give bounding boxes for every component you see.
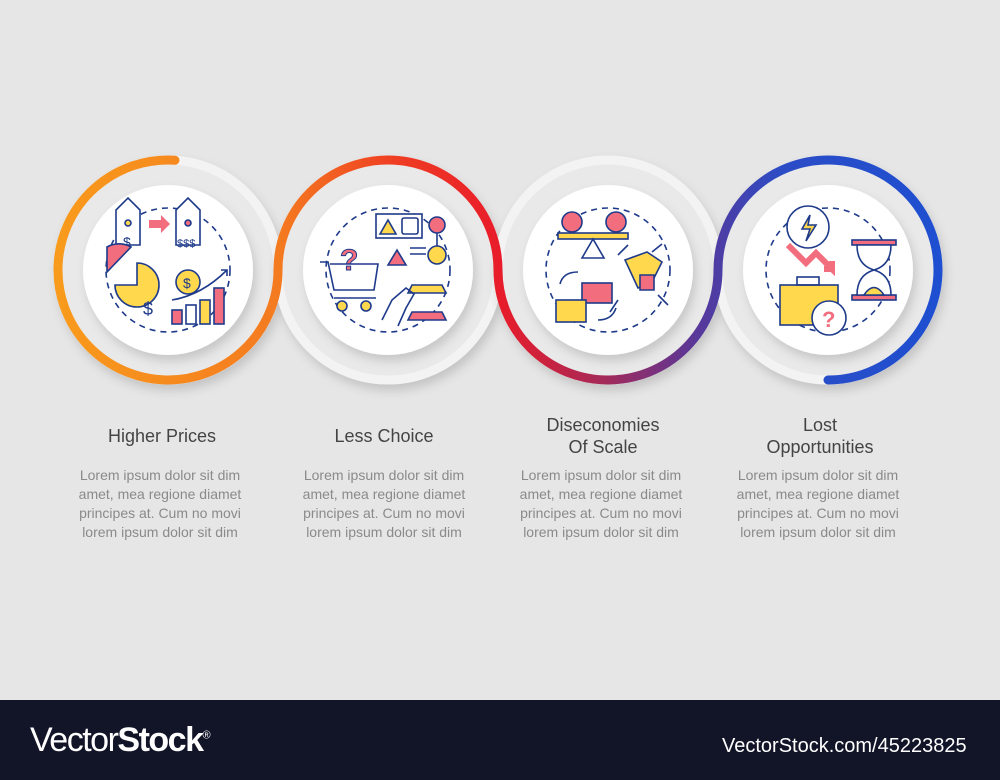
- text: diseconomies: amet, mea regione diamet: [520, 486, 682, 502]
- text: less choice: Lorem ipsum dolor sit dim: [304, 467, 464, 483]
- text: higher prices: lorem ipsum dolor sit dim: [82, 524, 238, 540]
- icon: higher prices: $: [183, 275, 191, 291]
- url: VectorStock.com/45223825: [722, 735, 967, 757]
- icon: higher prices: $: [123, 234, 131, 250]
- title: diseconomies of scale: [546, 415, 660, 457]
- text: lost opportunities: Lorem ipsum dolor sit dim: [738, 467, 898, 483]
- title: lost opportunities: Opportunities: [766, 437, 874, 457]
- text: diseconomies: principes at. Cum no movi: [520, 505, 682, 521]
- text: higher prices: Lorem ipsum dolor sit dim: [80, 467, 240, 483]
- text: lost opportunities: lorem ipsum dolor sit dim: [740, 524, 896, 540]
- icon: lost opportunities: ?: [822, 307, 835, 332]
- title: lost opportunities: [766, 415, 874, 457]
- text: lost opportunities: amet, mea regione diamet: [737, 486, 899, 502]
- text: less choice: [303, 467, 466, 540]
- icon: higher prices: [106, 198, 230, 332]
- text: less choice: amet, mea regione diamet: [303, 486, 465, 502]
- text: diseconomies: lorem ipsum dolor sit dim: [523, 524, 679, 540]
- title: diseconomies of scale: Diseconomies: [546, 415, 660, 435]
- icon: higher prices: $$$: [177, 238, 195, 250]
- icon: lost opportunities: [766, 206, 896, 335]
- gradient progress path: [58, 160, 938, 380]
- text: diseconomies: [520, 467, 682, 540]
- text: higher prices: principes at. Cum no movi: [79, 505, 241, 521]
- text: lost opportunities: [737, 467, 900, 540]
- icon: less choice: ?: [340, 244, 358, 277]
- icon: higher prices: $: [143, 299, 153, 319]
- text: less choice: lorem ipsum dolor sit dim: [306, 524, 462, 540]
- icon: diseconomies of scale: [546, 208, 670, 332]
- text: lost opportunities: principes at. Cum no movi: [737, 505, 899, 521]
- icon: less choice: [320, 208, 450, 332]
- title: higher prices: Higher Prices: [108, 426, 216, 446]
- text: diseconomies: Lorem ipsum dolor sit dim: [521, 467, 681, 483]
- logo: VectorStock®: [30, 721, 209, 759]
- title: less choice: Less Choice: [334, 426, 434, 446]
- text: higher prices: amet, mea regione diamet: [79, 486, 241, 502]
- footer: [0, 700, 1000, 780]
- title: lost opportunities: Lost: [803, 415, 837, 435]
- title: diseconomies of scale: Of Scale: [568, 437, 638, 457]
- text: higher prices: [79, 467, 242, 540]
- diagram: rings and icons: [53, 156, 948, 394]
- text: less choice: principes at. Cum no movi: [303, 505, 465, 521]
